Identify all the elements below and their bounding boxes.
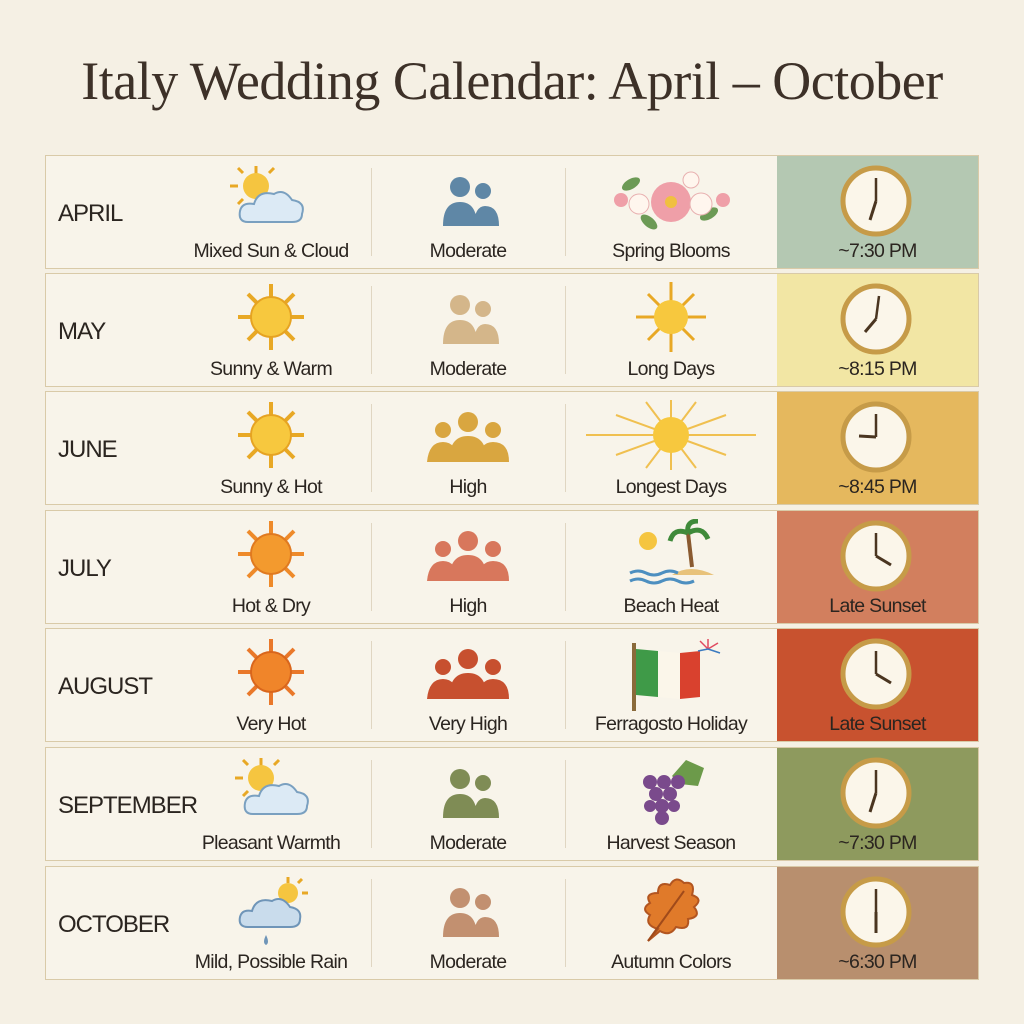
clock cell: ~7:30 PM — [838, 240, 917, 262]
icon: crowd moderate — [443, 177, 499, 226]
row: August — [45, 628, 979, 742]
icon: oak leaf — [644, 878, 700, 942]
row: April — [45, 155, 979, 269]
row: June — [45, 391, 979, 505]
row: May — [45, 273, 979, 387]
icon: hot sun — [238, 521, 304, 587]
label: crowd: Moderate — [430, 951, 506, 973]
clock cell: ~6:30 PM — [838, 951, 917, 973]
icon: Italian flag — [632, 639, 720, 711]
label: weather: Hot & Dry — [232, 595, 310, 617]
clock cell: Late Sunset — [829, 713, 926, 735]
label: highlight: Harvest Season — [607, 832, 735, 854]
icon: crowd very high — [427, 649, 509, 699]
month: July: JULY — [58, 555, 111, 582]
label: weather: Pleasant Warmth — [202, 832, 340, 854]
label: crowd: Moderate — [430, 358, 506, 380]
label: crowd: High — [449, 476, 487, 498]
title: Italy Wedding Calendar: April – October — [81, 51, 943, 111]
clock cell — [777, 867, 978, 979]
clock cell — [777, 629, 978, 741]
clock cell — [777, 392, 978, 504]
label: crowd: Very High — [429, 713, 507, 735]
label: weather: Sunny & Hot — [220, 476, 322, 498]
label: crowd: High — [449, 595, 487, 617]
label: weather: Mixed Sun & Cloud — [193, 240, 349, 262]
icon: sun and cloud — [230, 166, 304, 223]
icon: crowd moderate — [443, 295, 499, 344]
row: September — [45, 747, 979, 861]
icon: radiant sun — [586, 400, 756, 470]
month: June: JUNE — [58, 436, 117, 463]
clock cell: ~7:30 PM — [838, 832, 917, 854]
label: weather: Mild, Possible Rain — [195, 951, 347, 973]
month: August: AUGUST — [58, 673, 152, 700]
row: July — [45, 510, 979, 624]
icon: crowd high — [427, 412, 509, 462]
row: October — [45, 866, 979, 980]
label: highlight: Spring Blooms — [612, 240, 730, 262]
icon: crowd high — [427, 531, 509, 581]
label: weather: Sunny & Warm — [210, 358, 332, 380]
label: crowd: Moderate — [430, 240, 506, 262]
month: April: APRIL — [58, 200, 122, 227]
icon: sun — [238, 402, 304, 468]
icon: sun and cloud — [235, 758, 309, 815]
label: crowd: Moderate — [430, 832, 506, 854]
label: highlight: Beach Heat — [624, 595, 718, 617]
clock cell: Late Sunset — [829, 595, 926, 617]
label: highlight: Longest Days — [616, 476, 726, 498]
icon: grapes — [643, 760, 704, 825]
clock cell: ~8:45 PM — [838, 476, 917, 498]
label: highlight: Autumn Colors — [611, 951, 731, 973]
clock cell — [777, 274, 978, 386]
icon: cloud with rain — [238, 877, 308, 945]
icon: very hot sun — [238, 639, 304, 705]
month: September: SEPTEMBER — [58, 792, 197, 819]
icon: crowd moderate — [443, 769, 499, 818]
month: October: OCTOBER — [58, 911, 169, 938]
icon: crowd moderate — [443, 888, 499, 937]
clock cell — [777, 156, 978, 268]
label: highlight: Ferragosto Holiday — [595, 713, 747, 735]
clock cell: ~8:15 PM — [838, 358, 917, 380]
clock cell — [777, 748, 978, 860]
clock cell — [777, 511, 978, 623]
icon: beach — [629, 519, 714, 584]
icon: flowers — [614, 172, 730, 230]
month: May: MAY — [58, 318, 105, 345]
icon: sun — [238, 284, 304, 350]
icon: sun long days — [636, 282, 706, 352]
label: highlight: Long Days — [628, 358, 714, 380]
label: weather: Very Hot — [236, 713, 306, 735]
